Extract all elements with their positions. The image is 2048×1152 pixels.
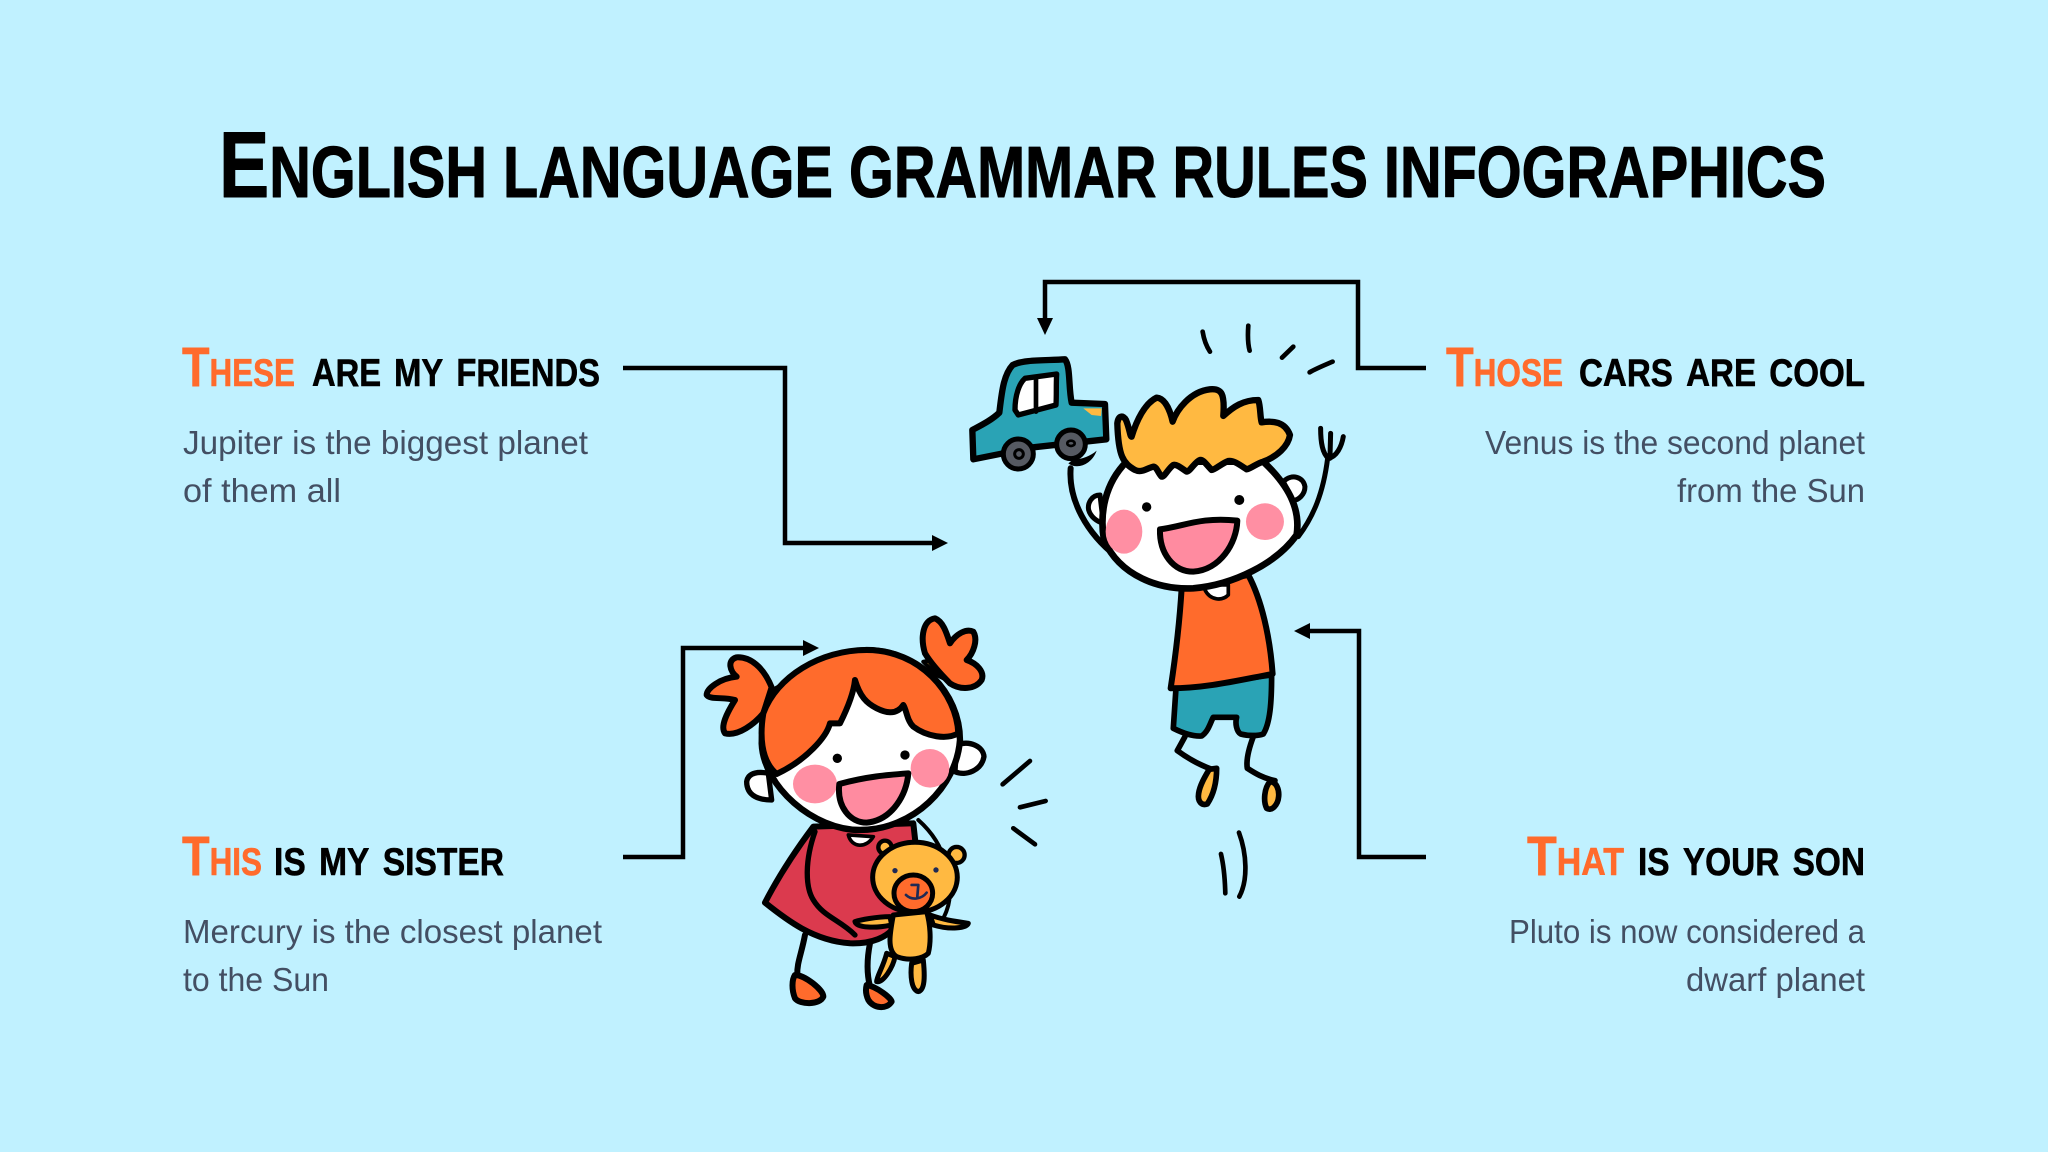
pigtail: left [707, 657, 780, 734]
heading: these: These [182, 335, 295, 398]
window divider [1029, 377, 1043, 412]
shorts [1173, 675, 1272, 736]
panel: those cars are cool [1446, 335, 1865, 509]
motion lines [1221, 833, 1245, 897]
heading: this: This [182, 824, 262, 887]
pigtail: right [923, 618, 982, 688]
shoes [1198, 768, 1279, 809]
heading: is your son: is your son [1638, 824, 1865, 887]
body text: Jupiter: Jupiter is the biggest planet [183, 424, 588, 461]
left arm [807, 832, 855, 935]
bear head [873, 842, 957, 912]
heading: that: That [1527, 824, 1624, 887]
cheeks [793, 749, 949, 803]
car window [1015, 374, 1057, 415]
mouth [1160, 520, 1237, 572]
dress [765, 823, 920, 943]
body text: dwarf planet: dwarf planet [1686, 961, 1865, 998]
car body [972, 359, 1106, 459]
body text: Mercury: Mercury is the closest planet [183, 913, 602, 950]
panel: these are my friends [182, 335, 600, 509]
bear arms [855, 915, 968, 928]
ears [1088, 477, 1305, 523]
arrow: those to car [1037, 282, 1426, 368]
legs [1177, 737, 1275, 781]
eyes [833, 750, 910, 763]
collar [848, 835, 873, 845]
action lines [1003, 761, 1046, 844]
bear eyes [892, 867, 939, 873]
cheeks [1106, 503, 1284, 554]
bear ears [878, 841, 965, 863]
body text: of them all: of them all [183, 472, 341, 509]
arrow: this to girl [623, 640, 819, 857]
panel: this is my sister [182, 824, 602, 998]
tail light [1083, 408, 1102, 416]
heading: are my friends: are my friends [312, 335, 600, 398]
hair [762, 650, 958, 774]
right arm [1298, 428, 1343, 537]
heading: those: Those [1446, 335, 1563, 398]
shoes [792, 975, 892, 1007]
illustration: girl with teddy bear [707, 618, 1046, 1007]
body text: Pluto: Pluto is now considered a [1509, 913, 1866, 950]
shirt [1171, 575, 1273, 688]
mouth [839, 773, 908, 823]
boy body [1171, 575, 1279, 809]
collar [1205, 585, 1228, 599]
illustration: boy with car [972, 326, 1343, 897]
teddy bear [855, 841, 968, 992]
left arm [1070, 468, 1117, 557]
panel: that is your son [1509, 824, 1866, 998]
arrow: that to boy [1294, 623, 1426, 857]
heading: is my sister: is my sister [274, 824, 504, 887]
icon: car [972, 359, 1106, 469]
heading: cars are cool: cars are cool [1579, 335, 1865, 398]
bear snout [894, 875, 933, 912]
bear body [890, 912, 930, 959]
boy hand [1068, 451, 1097, 466]
body text: Venus: Venus is the second planet [1485, 424, 1865, 461]
face [762, 650, 960, 830]
right arm [918, 820, 949, 922]
car wheels [1003, 430, 1085, 469]
legs [797, 935, 870, 987]
arrow: these to friends [623, 368, 948, 551]
bear mouth [906, 885, 927, 899]
eyes [1142, 495, 1244, 512]
ears [747, 743, 984, 800]
body text: to the Sun: to the Sun [183, 961, 329, 998]
hair [1117, 389, 1290, 477]
head [1102, 462, 1297, 588]
bear legs [877, 953, 924, 992]
action lines [1203, 326, 1333, 372]
body text: from the Sun: from the Sun [1677, 472, 1865, 509]
